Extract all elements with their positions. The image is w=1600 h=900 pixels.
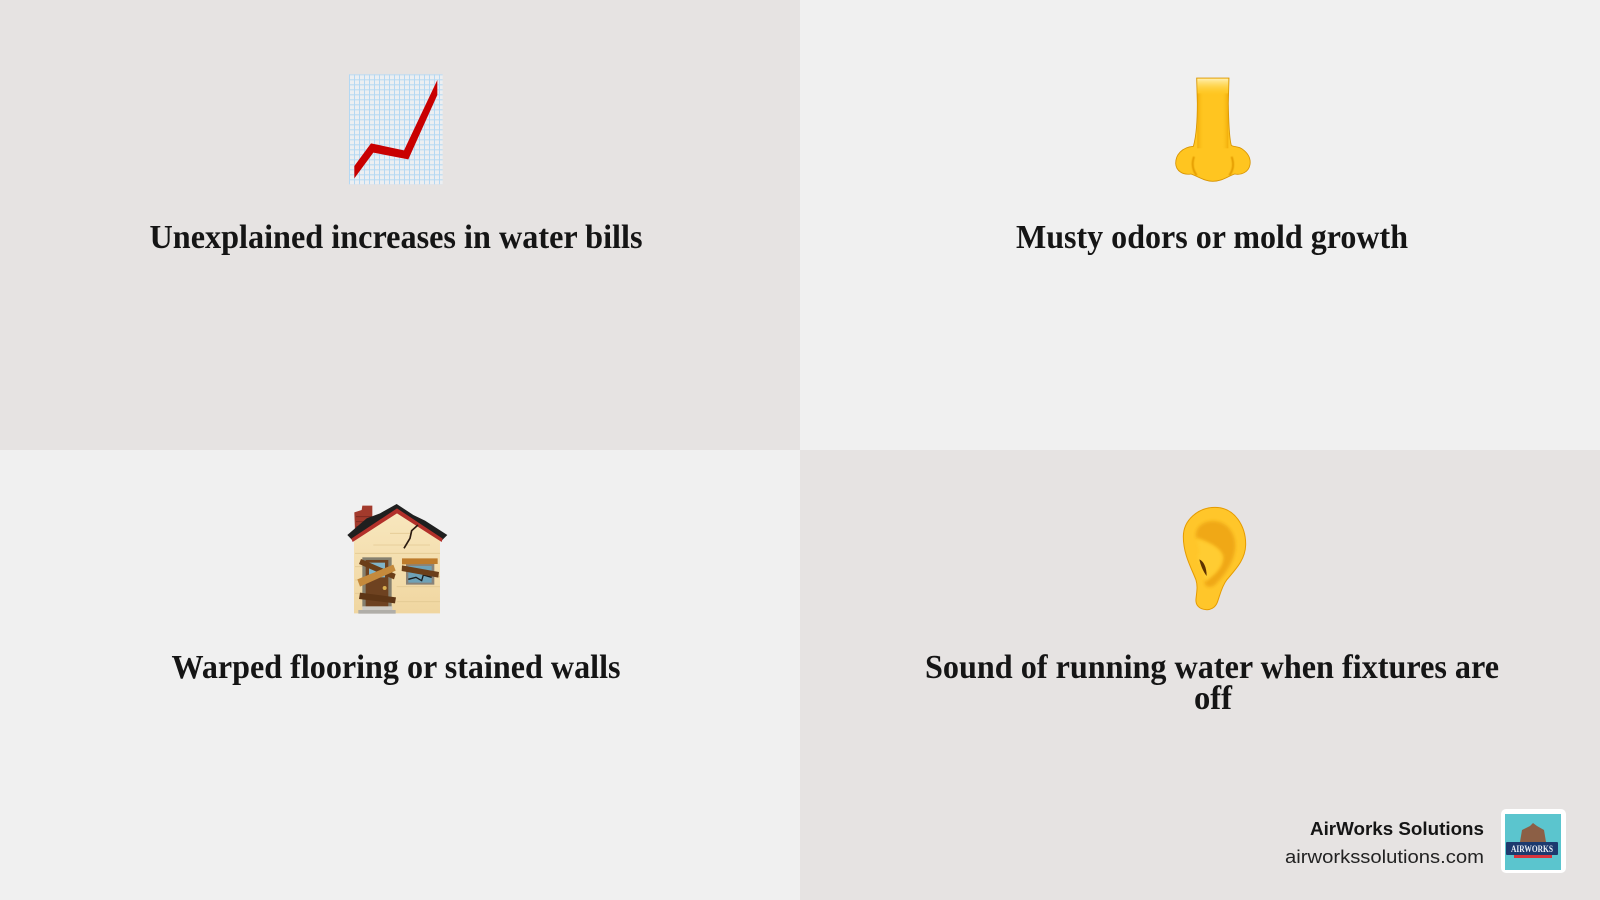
panel: running water (800, 450, 1600, 900)
brand URL: airworkssolutions.com (1285, 846, 1484, 867)
brand: AirWorks Solutions (1285, 809, 1566, 873)
heading: running water: Sound of running water when fixtures are (925, 649, 1499, 686)
panel: musty odors (800, 0, 1600, 450)
panel: water bills (0, 0, 800, 450)
heading: musty odors: Musty odors or mold growth (1016, 219, 1408, 256)
brand name: AirWorks Solutions (1310, 818, 1484, 839)
heading: warped flooring: Warped flooring or stained walls (172, 649, 620, 686)
logo (1501, 809, 1566, 873)
icon: rising chart (349, 74, 443, 184)
logo: AIRWORKS (1511, 844, 1553, 854)
icon: nose (1176, 78, 1250, 181)
panel: running water: off (1194, 680, 1233, 717)
heading: water bills: Unexplained increases in water bills (150, 219, 642, 256)
panel: warped flooring (0, 450, 800, 900)
icon: derelict house (347, 504, 447, 614)
icon: ear (1183, 507, 1246, 610)
